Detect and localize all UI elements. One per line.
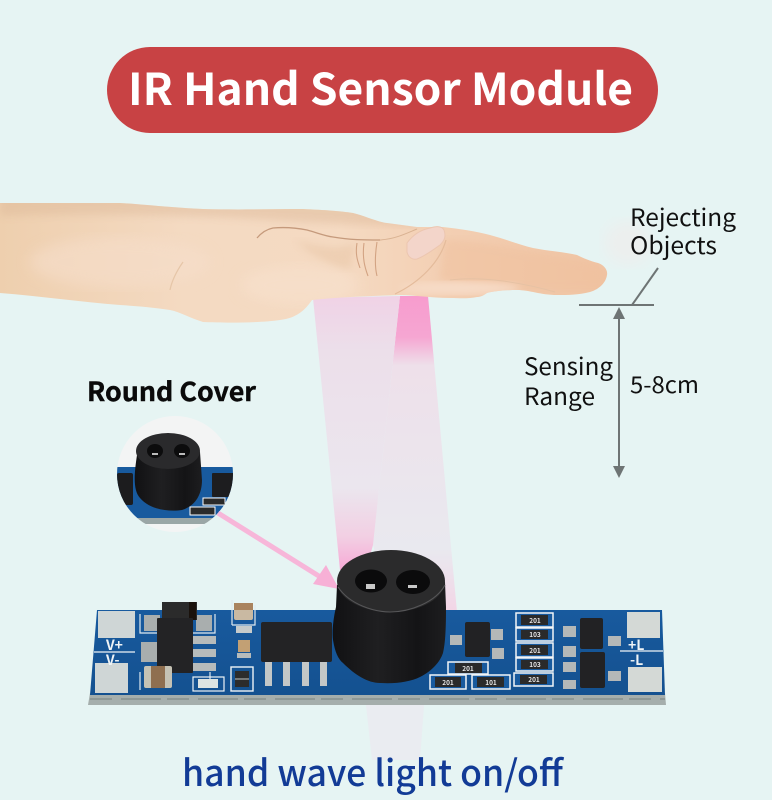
shading under thumb and fingers (442, 242, 604, 288)
hand (0, 203, 608, 323)
resistors: 201 (529, 645, 541, 655)
label: sensing range: Range (524, 377, 595, 412)
silkscreen labels: V- (105, 650, 120, 670)
silkscreen outlines (140, 600, 255, 690)
finger lines (450, 279, 555, 292)
board top (90, 610, 665, 695)
inset: round cover close-up (117, 416, 233, 532)
IC with legs (261, 622, 332, 686)
blurred patch near fingertip (604, 221, 652, 265)
pink arrow to sensor cap (218, 513, 339, 589)
resistors: 201 (442, 677, 454, 687)
resistors: 201 (462, 663, 474, 673)
pointer line to rejecting objects (579, 268, 658, 305)
silkscreen labels: V+ (105, 635, 123, 655)
solder pads (98, 611, 135, 638)
silkscreen labels: -L (630, 650, 643, 670)
regulator and diode (141, 602, 216, 673)
small transistors (450, 618, 621, 689)
thumb crease (257, 228, 380, 240)
title banner (107, 47, 658, 133)
small LED and resistor (193, 667, 253, 691)
shading on top of hand (2, 203, 406, 226)
label: distance value: 5-8cm (630, 366, 699, 400)
label: rejecting objects (630, 198, 736, 261)
wrist crease (170, 262, 183, 290)
resistors: 103 (529, 659, 541, 669)
thumbnail (407, 227, 445, 259)
sensing range arrow (613, 307, 625, 478)
silkscreen labels (94, 635, 663, 670)
resistors: 101 (485, 677, 497, 687)
heading: round cover: Round Cover (87, 372, 257, 409)
silkscreen labels: +L (628, 635, 644, 655)
resistors (430, 613, 553, 689)
board side edge (88, 693, 666, 705)
thumb underside (395, 240, 446, 294)
label: rejecting objects: Rejecting (630, 198, 736, 233)
resistors: 201 (528, 674, 540, 684)
title banner: IR Hand Sensor Module (128, 54, 633, 118)
light beams (313, 296, 457, 760)
resistors: 201 (529, 615, 541, 625)
sensor module board (88, 550, 666, 705)
label: sensing range (524, 347, 613, 412)
caption: hand wave light on/off (182, 745, 565, 797)
label: rejecting objects: Objects (630, 226, 717, 261)
label: sensing range: Sensing (524, 347, 613, 382)
sensor cap (333, 550, 446, 683)
resistors: 103 (529, 629, 541, 639)
capacitors (144, 603, 253, 688)
thumb wrinkles (356, 242, 377, 276)
